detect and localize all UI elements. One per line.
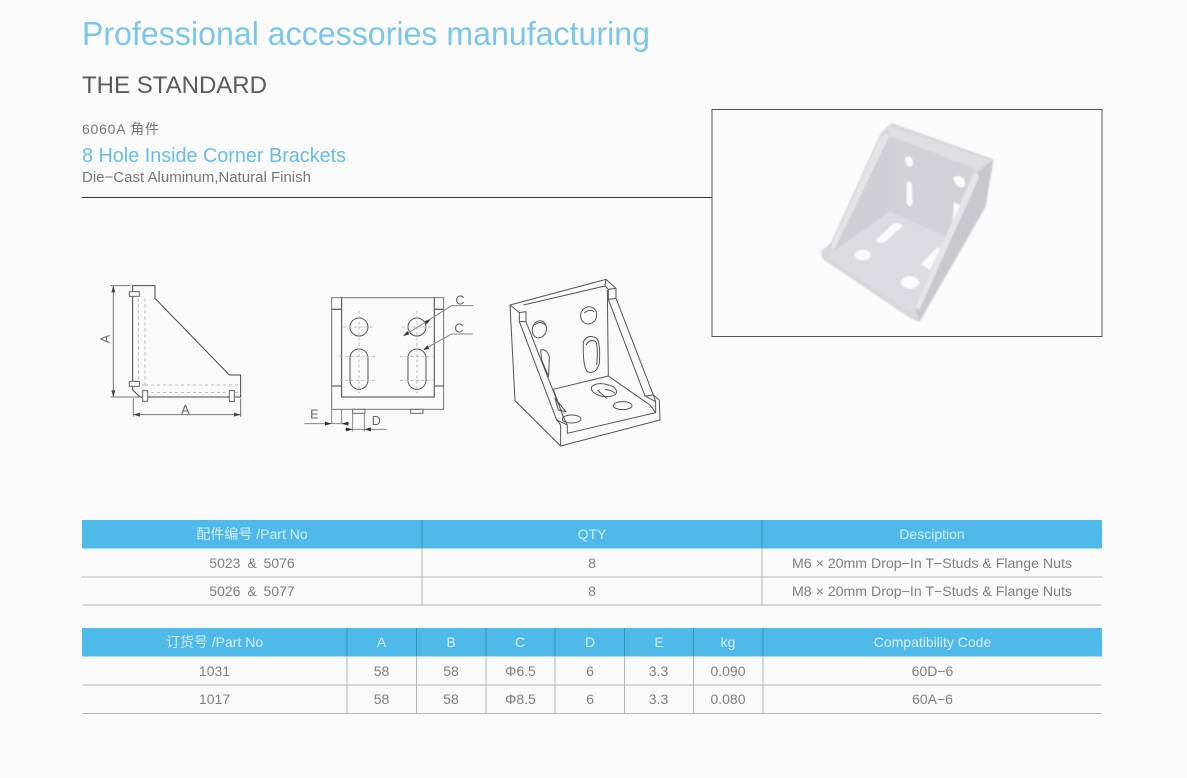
panel: product photo (712, 110, 1102, 336)
table header: accessories (82, 520, 1102, 548)
table header: dimensions: E (654, 634, 664, 650)
table header: dimensions: 订货号 /Part No (166, 634, 263, 650)
table: accessories (82, 520, 1102, 605)
row: 5026: M8 × 20mm Drop−In T−Studs & Flange Nuts (792, 583, 1072, 599)
row: 5023: M6 × 20mm Drop−In T−Studs & Flange Nuts (792, 555, 1072, 571)
title: Professional accessories manufacturing (82, 15, 650, 52)
row: 5023 (209, 555, 1072, 571)
table header: dimensions: Compatibility Code (874, 634, 991, 650)
row: 1031: 3.3 (649, 663, 668, 679)
material label: 6060A 角件 (82, 121, 159, 137)
row: 1031: 58 (374, 663, 389, 679)
row: 1031 (199, 663, 954, 679)
table header: accessories: 配件编号 /Part No (196, 526, 308, 542)
row: 5026: 5026 & 5077 (209, 583, 295, 599)
row: 5026 (209, 583, 1072, 599)
row: 1017: 60A−6 (912, 691, 953, 707)
row: 1017: 3.3 (649, 691, 668, 707)
diagram: side view (99, 286, 241, 417)
photo: aluminum bracket (822, 124, 993, 321)
dimension label E: E (310, 407, 319, 421)
table header: accessories: Desciption (899, 526, 965, 542)
row: 5023: 5023 & 5076 (209, 555, 295, 571)
diagram: isometric view (510, 279, 660, 446)
table header: dimensions: B (446, 634, 456, 650)
row: 1031: 0.090 (710, 663, 746, 679)
table header: dimensions: kg (721, 634, 735, 650)
row: 1017: 6 (586, 691, 594, 707)
table header: dimensions: A (377, 634, 387, 650)
table header: accessories: QTY (578, 526, 607, 542)
row: 1031: 6 (586, 663, 594, 679)
row: 1031: 1031 (199, 663, 230, 679)
product finish: Die−Cast Aluminum,Natural Finish (82, 169, 311, 186)
dimension label C upper: C (455, 294, 465, 308)
row: 1017: 0.080 (710, 691, 746, 707)
dimension label D: D (372, 414, 381, 428)
dimension label C lower: C (454, 322, 464, 336)
product name: 8 Hole Inside Corner Brackets (82, 145, 346, 167)
row: 1017 (199, 691, 953, 707)
row: 1017: 58 (374, 691, 389, 707)
row: 1031: Φ6.5 (505, 663, 536, 679)
dimension label A vertical: A (99, 334, 113, 343)
row: 5026: 8 (588, 583, 596, 599)
row: 5023: 8 (588, 555, 596, 571)
diagram: front view (304, 294, 473, 432)
table header: dimensions: C (515, 634, 525, 650)
row: 1031: 58 (443, 663, 459, 679)
table: dimensions (82, 628, 1102, 714)
row: 1017: Φ8.5 (505, 691, 536, 707)
table header: dimensions: D (585, 634, 595, 650)
row: 1031: 60D−6 (912, 663, 954, 679)
table header: dimensions (82, 628, 1102, 656)
dimension label A horizontal: A (181, 403, 190, 417)
row: 1017: 58 (443, 691, 459, 707)
row: 1017: 1017 (199, 691, 230, 707)
heading: the standard: THE STANDARD (82, 72, 267, 99)
